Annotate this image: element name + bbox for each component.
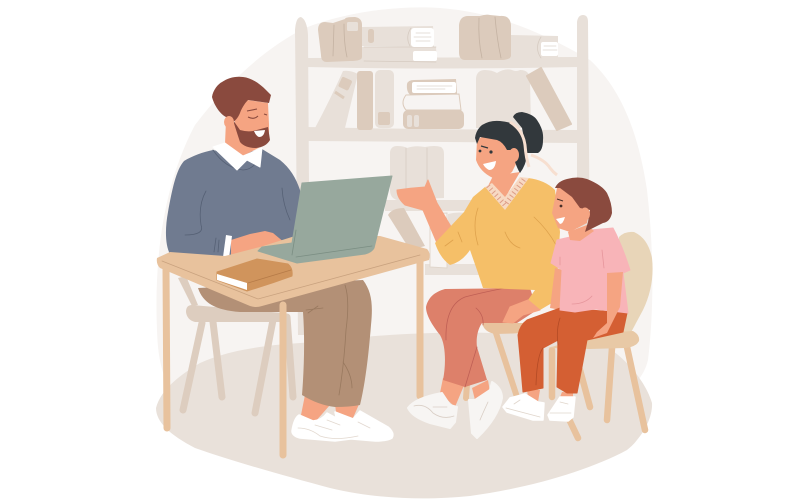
- girl's trousers: [518, 307, 627, 393]
- girl's hair: [555, 178, 612, 232]
- woman's shoes: [408, 382, 502, 438]
- desk top: [157, 236, 430, 307]
- girl's ankles: [527, 390, 573, 402]
- woman's trousers: [426, 288, 537, 387]
- woman's mouth: [483, 161, 496, 170]
- bookshelf: [295, 15, 590, 335]
- girl's ear: [580, 208, 590, 220]
- books: middle left group: [315, 70, 394, 130]
- woman: [397, 112, 560, 438]
- shoe creases: [414, 402, 488, 420]
- woman's chair: [466, 323, 532, 398]
- books: third row: [388, 146, 470, 268]
- books: right group: [476, 68, 571, 130]
- desk edge line: [162, 255, 420, 299]
- man's collar: [213, 143, 262, 170]
- girl: [503, 178, 630, 421]
- notebook on desk: [217, 259, 292, 291]
- man's hair: [212, 77, 271, 122]
- woman's ankles: [440, 378, 490, 407]
- man's cuff: [223, 235, 232, 258]
- woman's collar: [485, 177, 529, 210]
- girl's shoes: [503, 394, 575, 421]
- woman's hair: [475, 121, 527, 173]
- girl's face: [552, 185, 590, 232]
- woman's face: [476, 128, 519, 178]
- chair back: [619, 232, 653, 338]
- woman's forearm and hand: [397, 180, 453, 243]
- man's ear: [224, 116, 234, 128]
- girl's neck: [568, 225, 594, 241]
- girl's shirt: [551, 228, 630, 313]
- books: top right group: [459, 15, 558, 61]
- sweater creases: [185, 150, 290, 252]
- man: [166, 77, 393, 441]
- desk: [157, 236, 430, 455]
- trouser creases: [536, 318, 560, 385]
- man's feet and shoes: [292, 395, 393, 441]
- books: top left group: [318, 17, 362, 62]
- man's sweater: [166, 149, 302, 258]
- man's beard: [233, 120, 270, 148]
- trouser creases: [446, 288, 505, 387]
- shoe creases: [506, 400, 571, 417]
- woman's hand on lap: [503, 300, 540, 323]
- man's trousers: [198, 280, 372, 407]
- man's mouth: [254, 130, 265, 137]
- collar stripes: [488, 178, 525, 205]
- man's face: [232, 100, 269, 140]
- girl's far arm: [550, 268, 563, 310]
- shirt creases: [560, 250, 604, 304]
- man's eyes: [247, 109, 267, 118]
- floor: [156, 332, 652, 498]
- shelf frame: [295, 15, 590, 335]
- man's hand: [231, 231, 285, 258]
- woman's sweater: [435, 178, 560, 310]
- girl's chair: [535, 232, 653, 438]
- man's chair: [178, 276, 293, 413]
- girl's near arm: [593, 272, 623, 338]
- sweater creases: [445, 208, 556, 248]
- laptop: [258, 176, 392, 263]
- trouser creases: [306, 285, 352, 395]
- books: centre stack: [403, 79, 464, 129]
- woman's ear: [509, 148, 519, 162]
- girl's eyes: [560, 205, 562, 207]
- girl's mouth: [556, 217, 565, 224]
- man's neck: [225, 120, 262, 156]
- woman's neck: [488, 172, 520, 198]
- chair seat: [548, 331, 639, 349]
- desk legs: [166, 260, 420, 455]
- hair ribbon: [510, 122, 557, 175]
- background blob: [156, 7, 652, 400]
- books: lying pair: [362, 26, 437, 62]
- woman's bun: [513, 112, 543, 153]
- woman's eyes: [481, 146, 488, 148]
- chair legs: [535, 347, 645, 438]
